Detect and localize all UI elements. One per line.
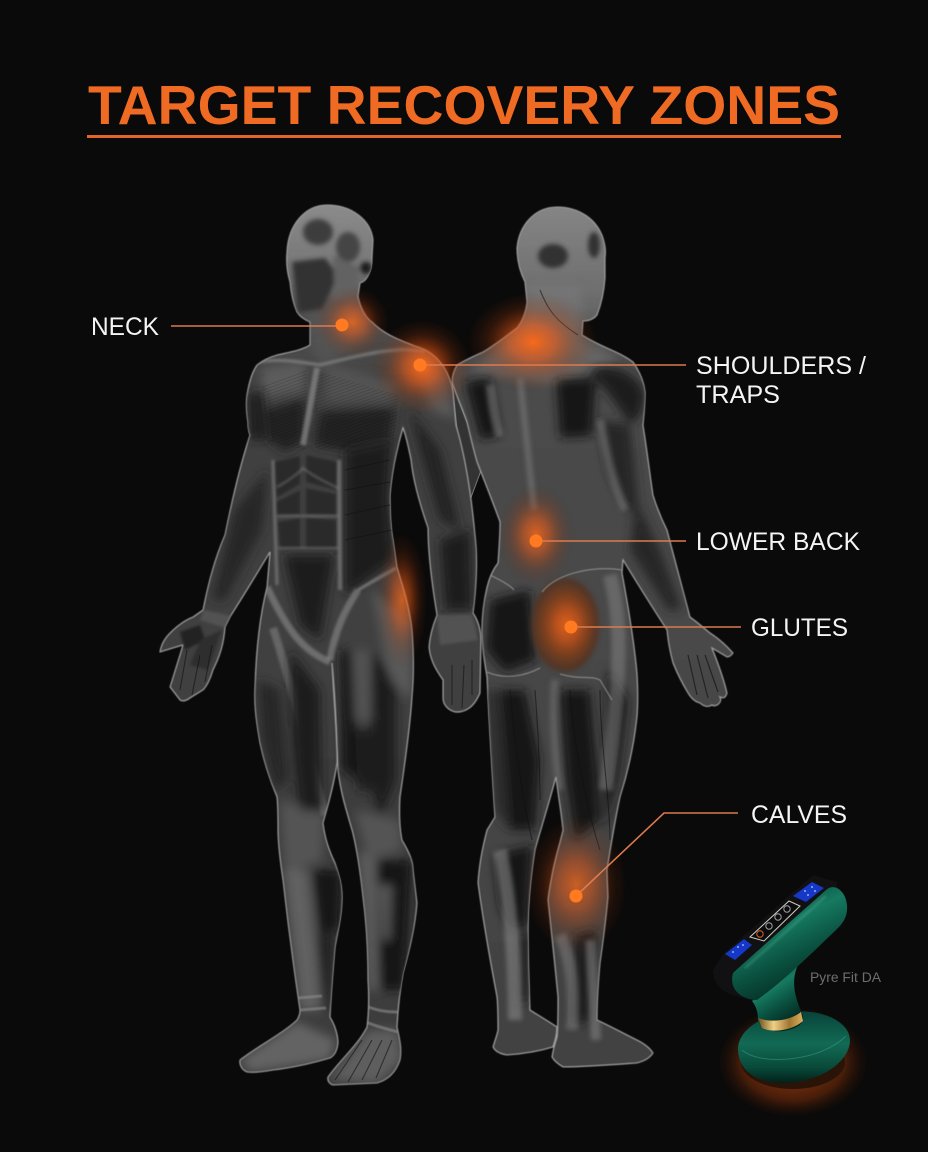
back dark muscle shading [465,368,682,1025]
title: TARGET RECOVERY ZONES [88,74,840,136]
device blue light pad right [793,882,824,902]
chest fibre texture [262,370,398,408]
front leg shading [240,590,412,1084]
back head shading [538,232,600,268]
back figure muscles [465,232,682,1040]
device control panel [750,901,800,941]
front oblique and lower abdomen shading [284,440,394,640]
callout: neck [91,313,348,341]
product label: Pyre Fit DA [810,970,881,985]
callout: shoulders and traps: TRAPS [696,381,780,409]
back light tendons [490,378,625,1040]
front light tendons [257,350,425,815]
device handle [732,887,847,1000]
front chest [262,362,395,452]
callout: glutes: GLUTES [751,614,848,642]
callout: shoulders and traps: SHOULDERS / [696,352,866,380]
front view figure [160,205,481,1085]
infographic canvas [87,86,881,1114]
back view figure [452,207,733,1067]
glow: glutes [532,581,604,669]
back neck and trap tone [474,298,616,386]
device neck [752,965,803,1031]
back fine lines [510,290,610,850]
callout: lower back [530,528,860,556]
callout: calves: CALVES [751,801,847,829]
front figure silhouette [160,205,481,1085]
callout: neck: NECK [91,313,159,341]
device glow [717,1006,869,1118]
front figure muscles [180,219,478,1084]
back figure silhouette [452,207,733,1067]
back glute outlines [487,569,622,700]
device gold ring [758,1012,803,1031]
glow: hip front [376,532,428,668]
glow: shoulder front [372,319,472,415]
device base [738,1011,850,1089]
back glute [531,578,599,672]
front arm shading [212,350,472,610]
callout: glutes [564,614,848,642]
front fine lines [180,460,472,1082]
callout: lower back: LOWER BACK [696,528,860,556]
glow: lower back [498,485,574,585]
front hand shading [180,610,478,670]
product: massage device [713,875,869,1118]
back hand detail [688,655,718,698]
glow: calf [524,815,628,955]
front ankle straps [298,996,400,1032]
front neck tone [308,321,342,360]
front abs [274,455,338,548]
callout: shoulders and traps [414,352,866,409]
front face shading [292,219,372,312]
device blue light pad left [725,939,752,960]
glow: neck and traps back [467,292,599,392]
glow: neck front [314,286,390,358]
back figure far arm [452,382,482,500]
device head [713,875,838,1000]
callout: calves [570,801,847,902]
